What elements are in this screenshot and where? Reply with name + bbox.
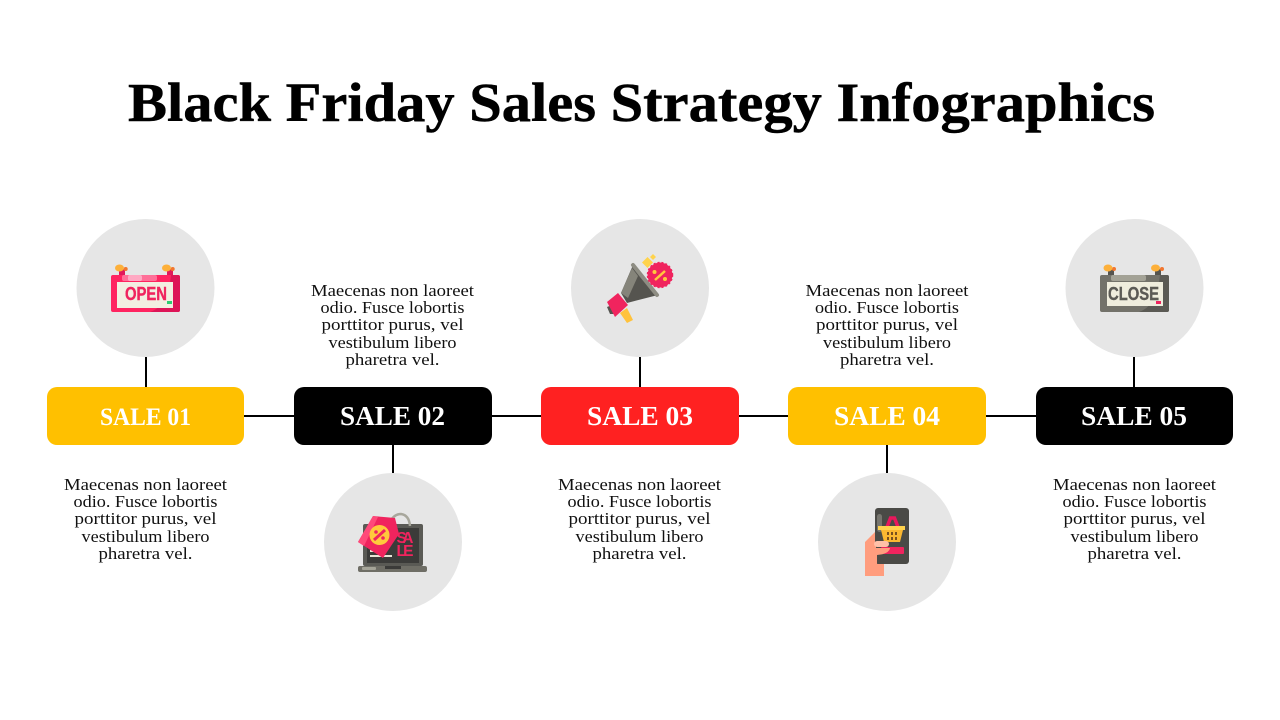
label: sale 04: SALE 04 xyxy=(834,400,940,431)
text: sale 04 description xyxy=(806,281,969,369)
text: sale 01 description: odio. Fusce lobortis xyxy=(74,492,218,511)
text: sale 03 description: pharetra vel. xyxy=(592,544,686,563)
label: sale 03 xyxy=(541,387,739,445)
icon: close sign xyxy=(1066,219,1204,357)
text: sale 04 description: Maecenas non laoreet xyxy=(806,281,969,300)
step 3: sale 03 xyxy=(541,219,739,563)
text: sale 01 description: vestibulum libero xyxy=(82,527,210,546)
text: sale 01 description: porttitor purus, vel xyxy=(74,509,217,528)
icon: open sign: OPEN xyxy=(125,284,167,304)
label: sale 05 xyxy=(1036,387,1233,445)
text: sale 02 description: vestibulum libero xyxy=(328,333,456,352)
text: sale 04 description: porttitor purus, vel xyxy=(816,315,958,334)
title: Black Friday Sales Strategy Infographics xyxy=(128,72,1155,133)
text: sale 03 description: odio. Fusce lobortis xyxy=(568,492,712,511)
text: sale 02 description: pharetra vel. xyxy=(346,350,440,369)
text: sale 05 description: odio. Fusce lobortis xyxy=(1062,492,1206,511)
text: sale 03 description: vestibulum libero xyxy=(576,527,704,546)
text: sale 05 description: vestibulum libero xyxy=(1070,527,1198,546)
text: sale 04 description: odio. Fusce lobortis xyxy=(815,298,959,317)
text: sale 05 description: porttitor purus, vel xyxy=(1064,509,1206,528)
text: sale 03 description: porttitor purus, vel xyxy=(568,509,711,528)
text: sale 01 description xyxy=(64,475,227,563)
text: sale 03 description: Maecenas non laoreet xyxy=(558,475,721,494)
text: sale 05 description: pharetra vel. xyxy=(1088,544,1182,563)
label: sale 02: SALE 02 xyxy=(340,400,445,431)
label: sale 02 xyxy=(294,387,492,445)
label: sale 04 xyxy=(788,387,986,445)
label: sale 03: SALE 03 xyxy=(587,400,693,431)
label: sale 01 xyxy=(47,387,244,445)
text: sale 02 description: porttitor purus, vel xyxy=(322,315,464,334)
label: sale 01: SALE 01 xyxy=(100,404,191,431)
icon: laptop with sale tag: SA xyxy=(396,530,414,547)
step 5: sale 05 xyxy=(1036,219,1233,563)
text: sale 01 description: Maecenas non laoreet xyxy=(64,475,227,494)
icon: phone with shopping basket in hand xyxy=(818,473,956,611)
text: sale 02 description: odio. Fusce lobortis xyxy=(320,298,464,317)
step 2: sale 02 xyxy=(294,281,492,611)
step 4: sale 04 xyxy=(788,281,986,611)
icon: open sign xyxy=(76,219,214,357)
icon: laptop with sale tag: LE xyxy=(396,543,414,560)
icon: close sign: CLOSE xyxy=(1108,284,1159,304)
icon: laptop with sale tag xyxy=(324,473,462,611)
text: sale 05 description: Maecenas non laoreet xyxy=(1053,475,1216,494)
label: sale 05: SALE 05 xyxy=(1081,400,1187,431)
text: sale 02 description xyxy=(311,281,474,369)
text: sale 02 description: Maecenas non laoreet xyxy=(311,281,474,300)
text: sale 05 description xyxy=(1053,475,1216,563)
text: sale 04 description: vestibulum libero xyxy=(823,333,951,352)
step 1: sale 01 xyxy=(47,219,244,563)
text: sale 01 description: pharetra vel. xyxy=(98,544,192,563)
text: sale 03 description xyxy=(558,475,721,563)
icon: megaphone with discount badge xyxy=(571,219,709,357)
text: sale 04 description: pharetra vel. xyxy=(840,350,934,369)
